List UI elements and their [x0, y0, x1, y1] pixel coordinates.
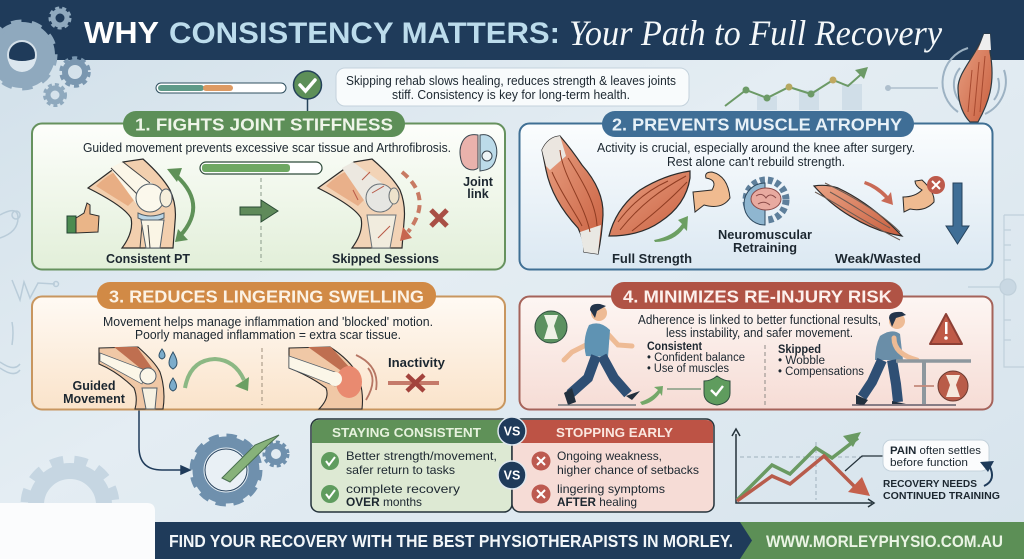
panel 2 description: Rest alone can't rebuild strength. — [667, 155, 845, 169]
joint link label: link — [467, 187, 489, 201]
benefit 2 — [321, 482, 460, 509]
label: skipped sessions: Skipped Sessions — [332, 252, 439, 266]
label: guided movement: Guided — [72, 379, 116, 393]
icon: thumbs up — [67, 203, 99, 233]
footer banner — [155, 522, 1024, 559]
icon: guided movement knee — [99, 347, 164, 409]
heading pill 1 — [123, 111, 405, 137]
title: WHY — [84, 15, 159, 50]
risk 2 — [532, 482, 665, 509]
staying consistent heading: STAYING CONSISTENT — [332, 425, 481, 440]
label: guided movement: Movement — [63, 392, 126, 406]
VS badge top — [498, 417, 526, 445]
title: Your Path to Full Recovery — [569, 13, 942, 53]
icon: brain and gear — [744, 180, 786, 225]
VS badge bottom — [498, 461, 526, 489]
intro callout: Skipping rehab slows healing, reduces strength & leaves joints — [346, 74, 676, 88]
decorative ruler right edge — [968, 215, 1024, 367]
header banner — [0, 0, 1024, 60]
heading pill 4 — [611, 282, 903, 309]
title: CONSISTENCY MATTERS: — [169, 17, 560, 50]
icon: muscle top right — [885, 34, 1006, 122]
panel 4 description: Adherence is linked to better functional results, — [638, 313, 881, 327]
icon: injured joint badge — [938, 371, 968, 401]
panel 2 description — [597, 141, 915, 169]
panel 1 description: Guided movement prevents excessive scar tissue and Arthrofibrosis. — [83, 141, 451, 155]
panel 1: fights joint stiffness — [32, 111, 505, 270]
icon: curved arrow up — [980, 461, 994, 486]
icon: check circle with stem — [294, 71, 322, 112]
VS badge top: VS — [504, 424, 520, 438]
icon: warning triangle — [930, 314, 962, 344]
panel: staying consistent — [311, 419, 512, 512]
ground line — [558, 404, 636, 406]
icon: curved arrow — [185, 359, 249, 391]
consistent list: Consistent — [647, 341, 702, 353]
icon: water drops — [159, 349, 177, 391]
recovery needs text: RECOVERY NEEDS — [883, 478, 977, 490]
handrail and ground — [852, 361, 971, 405]
connector arrow to gear — [139, 410, 190, 474]
arrow right — [240, 200, 278, 222]
risk 1: Ongoing weakness, — [557, 449, 662, 463]
benefit 2: OVER months — [346, 495, 422, 509]
line chart decoration top right — [725, 67, 868, 110]
risk 2: AFTER healing — [557, 495, 637, 509]
panel 4 description: less instability, and safer movement. — [666, 326, 853, 340]
decorative faint anatomy lines left edge — [0, 211, 58, 374]
figure: unsteady person at rail — [856, 312, 917, 405]
label: neuromuscular retraining — [718, 228, 812, 255]
VS badge bottom: VS — [504, 468, 520, 482]
progress bar top — [156, 83, 286, 93]
benefit 1: safer return to tasks — [346, 463, 455, 477]
icon: flexed arm — [693, 172, 730, 212]
skipped list — [778, 344, 864, 378]
icon: blue down arrow — [946, 183, 969, 244]
pain callout: PAIN often settles — [890, 445, 982, 457]
icon: green up arrow — [654, 216, 688, 242]
pain callout — [883, 440, 989, 471]
risk 1: higher chance of setbacks — [557, 463, 699, 477]
icon: weak arm with cross — [903, 176, 945, 212]
panel 3: reduces lingering swelling — [32, 282, 505, 410]
skipped list: Skipped — [778, 344, 821, 356]
icon: green arrow and shield — [640, 376, 730, 405]
benefit 1: Better strength/movement, — [346, 449, 497, 463]
figure: confident walker — [564, 304, 640, 405]
icon: healthy knee — [88, 159, 175, 248]
divider — [260, 178, 262, 262]
label: neuromuscular retraining: Retraining — [733, 241, 797, 255]
risk 1 — [532, 449, 699, 477]
benefit 1 — [321, 449, 497, 477]
icon: central gear with check — [193, 435, 288, 503]
icon: brain joint link — [460, 135, 497, 171]
intro callout — [336, 68, 689, 106]
panel 3 description — [103, 315, 433, 342]
recovery line chart — [732, 429, 883, 507]
panel 3 description: Poorly managed inflammation = extra scar tissue. — [135, 328, 401, 342]
icon: red down arrow — [864, 181, 893, 205]
consistent list: • Use of muscles — [647, 363, 729, 375]
heading pill 3: 3. REDUCES LINGERING SWELLING — [109, 286, 424, 306]
joint link label: Joint — [463, 175, 494, 189]
joint link label — [463, 175, 494, 201]
icon: healthy joint badge — [535, 311, 567, 343]
panel 2: prevents muscle atrophy — [520, 111, 992, 270]
heading pill 2: 2. PREVENTS MUSCLE ATROPHY — [612, 114, 902, 134]
skipped list: • Compensations — [778, 366, 864, 378]
benefit 2: complete recovery — [346, 482, 460, 496]
icon: strong muscle — [609, 171, 690, 236]
footer call to action: FIND YOUR RECOVERY WITH THE BEST PHYSIOTHERAPISTS IN MORLEY. — [169, 531, 733, 551]
heading pill 2 — [602, 111, 914, 137]
label: inactivity: Inactivity — [388, 356, 445, 370]
heading pill 4: 4. MINIMIZES RE-INJURY RISK — [623, 286, 892, 306]
icon: stiff knee — [318, 159, 404, 248]
footer website: WWW.MORLEYPHYSIO.COM.AU — [766, 532, 1003, 551]
icon: blocked line with cross — [388, 375, 439, 391]
risk 2: lingering symptoms — [557, 482, 665, 496]
decorative gears top left — [0, 8, 89, 106]
comparison table — [311, 417, 714, 512]
consistent list: • Confident balance — [647, 352, 745, 364]
icon: wasted muscle — [814, 183, 902, 240]
footer white corner — [0, 503, 155, 559]
stopping early heading: STOPPING EARLY — [556, 425, 673, 440]
recovery needs text — [883, 478, 1000, 502]
pain callout: before function — [890, 457, 968, 469]
icon: inflamed knee — [289, 347, 377, 409]
recovery needs text: CONTINUED TRAINING — [883, 490, 1000, 502]
panel 4: minimizes re-injury risk — [520, 282, 992, 410]
heading pill 3 — [97, 282, 436, 309]
label: neuromuscular retraining: Neuromuscular — [718, 228, 812, 242]
icon: dashed decline arrow — [400, 172, 420, 241]
icon: red cross — [431, 210, 447, 226]
panel 1 progress bar — [200, 162, 322, 174]
heading pill 1: 1. FIGHTS JOINT STIFFNESS — [135, 114, 393, 134]
title — [84, 13, 942, 53]
panel: stopping early — [512, 419, 714, 512]
divider — [261, 348, 263, 405]
consistent list — [647, 341, 745, 375]
label: consistent PT: Consistent PT — [106, 252, 190, 266]
skipped list: • Wobble — [778, 355, 825, 367]
panel 4 description — [638, 313, 881, 340]
label: guided movement — [63, 379, 126, 406]
panel 2 description: Activity is crucial, especially around the knee after surgery. — [597, 141, 915, 155]
icon: large muscle — [542, 136, 603, 254]
icon: curved motion arrow — [167, 168, 193, 242]
decorative gear bottom left — [25, 460, 115, 550]
divider — [764, 345, 766, 405]
label: full strength: Full Strength — [612, 252, 692, 266]
label: weak wasted: Weak/Wasted — [835, 252, 921, 266]
intro callout: stiff. Consistency is key for long-term health. — [392, 88, 630, 102]
panel 3 description: Movement helps manage inflammation and 'blocked' motion. — [103, 315, 433, 329]
